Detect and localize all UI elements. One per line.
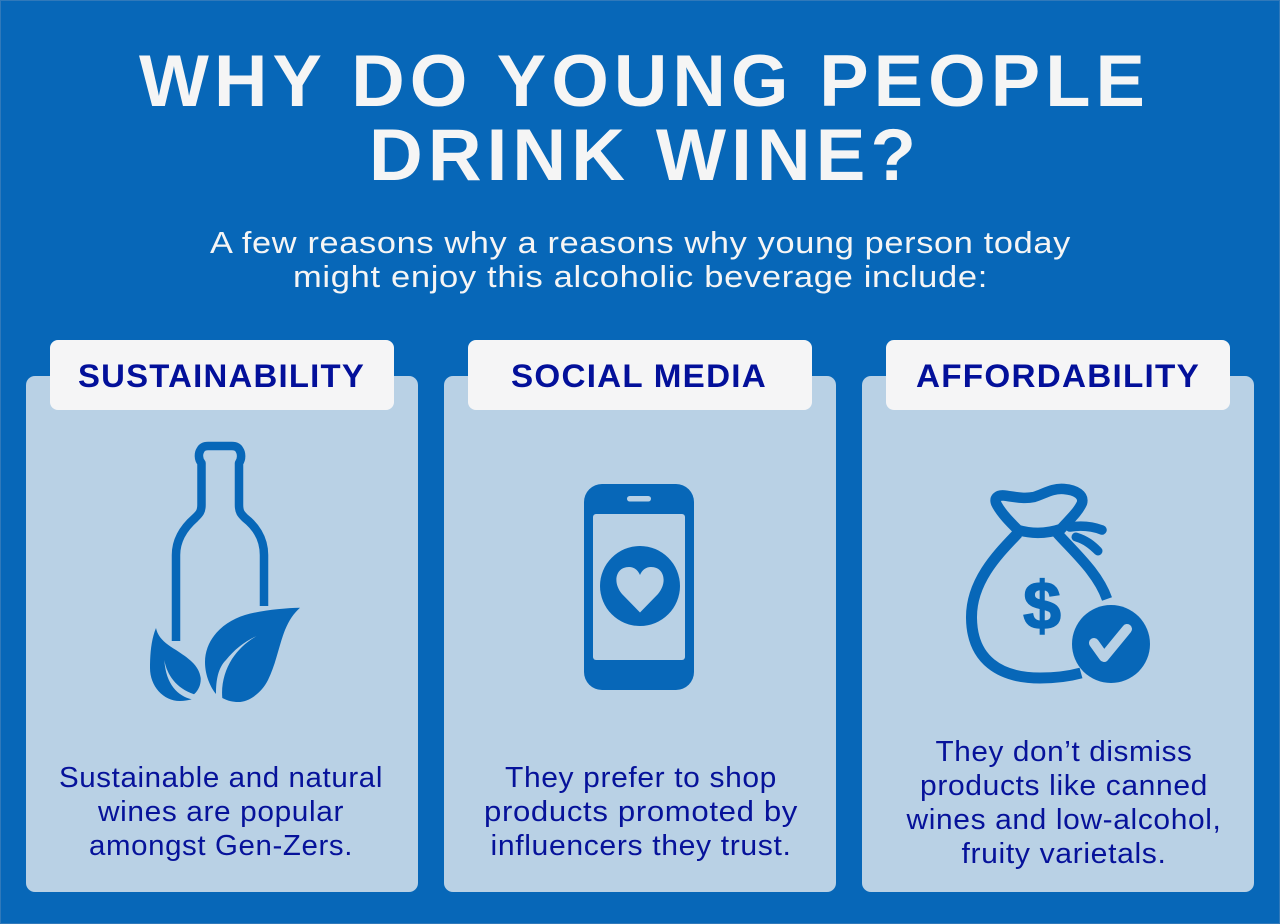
icon: money bag with check mark: $ — [1023, 568, 1061, 644]
panel: sustainability — [26, 340, 418, 892]
body text: social media: influencers they trust. — [490, 830, 792, 862]
icon: wine bottle with leaves — [150, 446, 300, 702]
heading: social media: SOCIAL MEDIA — [511, 358, 767, 394]
body text: affordability — [905, 736, 1222, 870]
body text: social media: They prefer to shop — [505, 762, 777, 794]
intro text: might enjoy this alcoholic beverage include: — [293, 259, 988, 294]
body text: sustainability: Sustainable and natural — [59, 762, 383, 794]
body text: social media — [484, 762, 798, 862]
title — [139, 41, 1150, 196]
heading: sustainability: SUSTAINABILITY — [78, 358, 365, 394]
heading: affordability — [886, 340, 1230, 410]
body text: affordability: products like canned — [920, 770, 1208, 802]
title: DRINK WINE? — [369, 115, 921, 196]
panel: affordability — [862, 340, 1254, 892]
body text: affordability: wines and low-alcohol, — [905, 804, 1222, 836]
body text: social media: products promoted by — [484, 796, 798, 828]
intro text — [210, 225, 1071, 294]
title: WHY DO YOUNG PEOPLE — [139, 41, 1150, 122]
heading: social media — [468, 340, 812, 410]
icon: money bag with check mark — [971, 489, 1150, 683]
body text: sustainability: wines are popular — [97, 796, 344, 828]
body text: affordability: fruity varietals. — [962, 838, 1166, 870]
panel background: affordability — [862, 376, 1254, 892]
heading: sustainability — [50, 340, 394, 410]
panel background: sustainability — [26, 376, 418, 892]
body text: sustainability: amongst Gen-Zers. — [89, 830, 353, 862]
heading: affordability: AFFORDABILITY — [916, 358, 1200, 394]
body text: sustainability — [59, 762, 383, 862]
body text: affordability: They don’t dismiss — [936, 736, 1192, 768]
intro text: A few reasons why a reasons why young person today — [210, 225, 1071, 260]
icon: smartphone with heart — [584, 484, 694, 690]
panel background: social media — [444, 376, 836, 892]
panel: social media — [444, 340, 836, 892]
